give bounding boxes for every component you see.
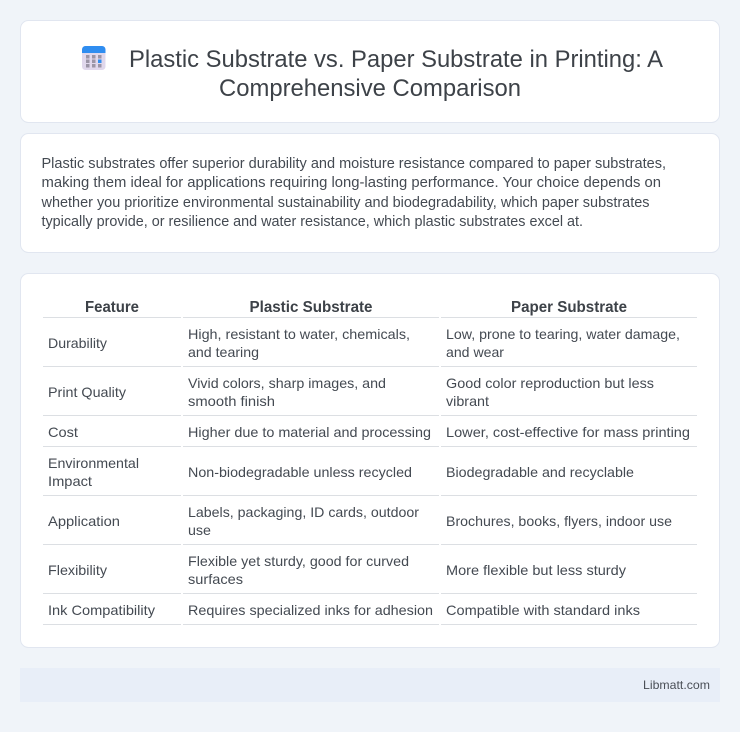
row: flexibility (43, 553, 697, 594)
footer (20, 668, 720, 702)
row: ink compatibility: Ink Compatibility (48, 602, 155, 618)
row: environmental impact (43, 455, 697, 496)
row: durability: and tearing (188, 344, 259, 360)
text block: introduction: whether you prioritize environmental sustainability and biodegradability, which paper substrates (40, 195, 650, 211)
row: flexibility: More flexible but less sturdy (446, 562, 626, 578)
row: print quality: Good color reproduction but less (446, 375, 654, 391)
row: environmental impact: Impact (48, 473, 92, 489)
row: environmental impact: Non-biodegradable unless recycled (188, 464, 412, 480)
row: print quality: Print Quality (48, 384, 126, 400)
row: environmental impact: Biodegradable and recyclable (446, 464, 634, 480)
title: Plastic Substrate vs. Paper Substrate in Printing: A (129, 46, 663, 73)
panel: title header (20, 20, 720, 122)
row: environmental impact: Environmental (48, 455, 139, 471)
text block: introduction: making them ideal for applications requiring long-lasting performance. Your choice depends on (42, 175, 661, 191)
row: print quality: smooth finish (188, 393, 275, 409)
row: application: Application (48, 513, 120, 529)
row: flexibility: surfaces (188, 571, 243, 587)
row: cost: Cost (48, 424, 78, 440)
text block: introduction: Plastic substrates offer superior durability and moisture resistance compared to paper substrates, (42, 156, 666, 172)
row: durability: Durability (48, 335, 107, 351)
row: application: Brochures, books, flyers, indoor use (446, 513, 672, 529)
row: durability (43, 326, 697, 367)
row: cost: Higher due to material and processing (188, 424, 431, 440)
text block: introduction (40, 156, 666, 230)
footer: Libmatt.com (643, 678, 710, 692)
text block: introduction: typically provide, or resilience and water resistance, which plastic substrates excel at. (42, 214, 583, 230)
row: flexibility: Flexible yet sturdy, good for curved (188, 553, 409, 569)
row: cost (43, 424, 697, 447)
row: print quality: Vivid colors, sharp images, and (188, 375, 386, 391)
table header: Plastic Substrate (250, 299, 373, 316)
row: ink compatibility: Compatible with standard inks (446, 602, 640, 618)
title (129, 46, 663, 102)
row: durability: and wear (446, 344, 504, 360)
row: durability: High, resistant to water, chemicals, (188, 326, 410, 342)
table header: Feature (85, 299, 139, 316)
row: application (43, 504, 697, 545)
table header (43, 299, 697, 318)
icon: calendar (82, 46, 106, 70)
panel: comparison table (20, 274, 720, 648)
row: application: use (188, 522, 211, 538)
row: print quality (43, 375, 697, 416)
row: application: Labels, packaging, ID cards, outdoor (188, 504, 419, 520)
table header: Paper Substrate (511, 299, 627, 316)
row: durability: Low, prone to tearing, water damage, (446, 326, 680, 342)
row: cost: Lower, cost-effective for mass printing (446, 424, 690, 440)
panel: introduction (20, 134, 720, 252)
title: Comprehensive Comparison (219, 75, 521, 102)
row: flexibility: Flexibility (48, 562, 107, 578)
row: ink compatibility (43, 602, 697, 625)
row: ink compatibility: Requires specialized inks for adhesion (188, 602, 433, 618)
row: print quality: vibrant (446, 393, 489, 409)
